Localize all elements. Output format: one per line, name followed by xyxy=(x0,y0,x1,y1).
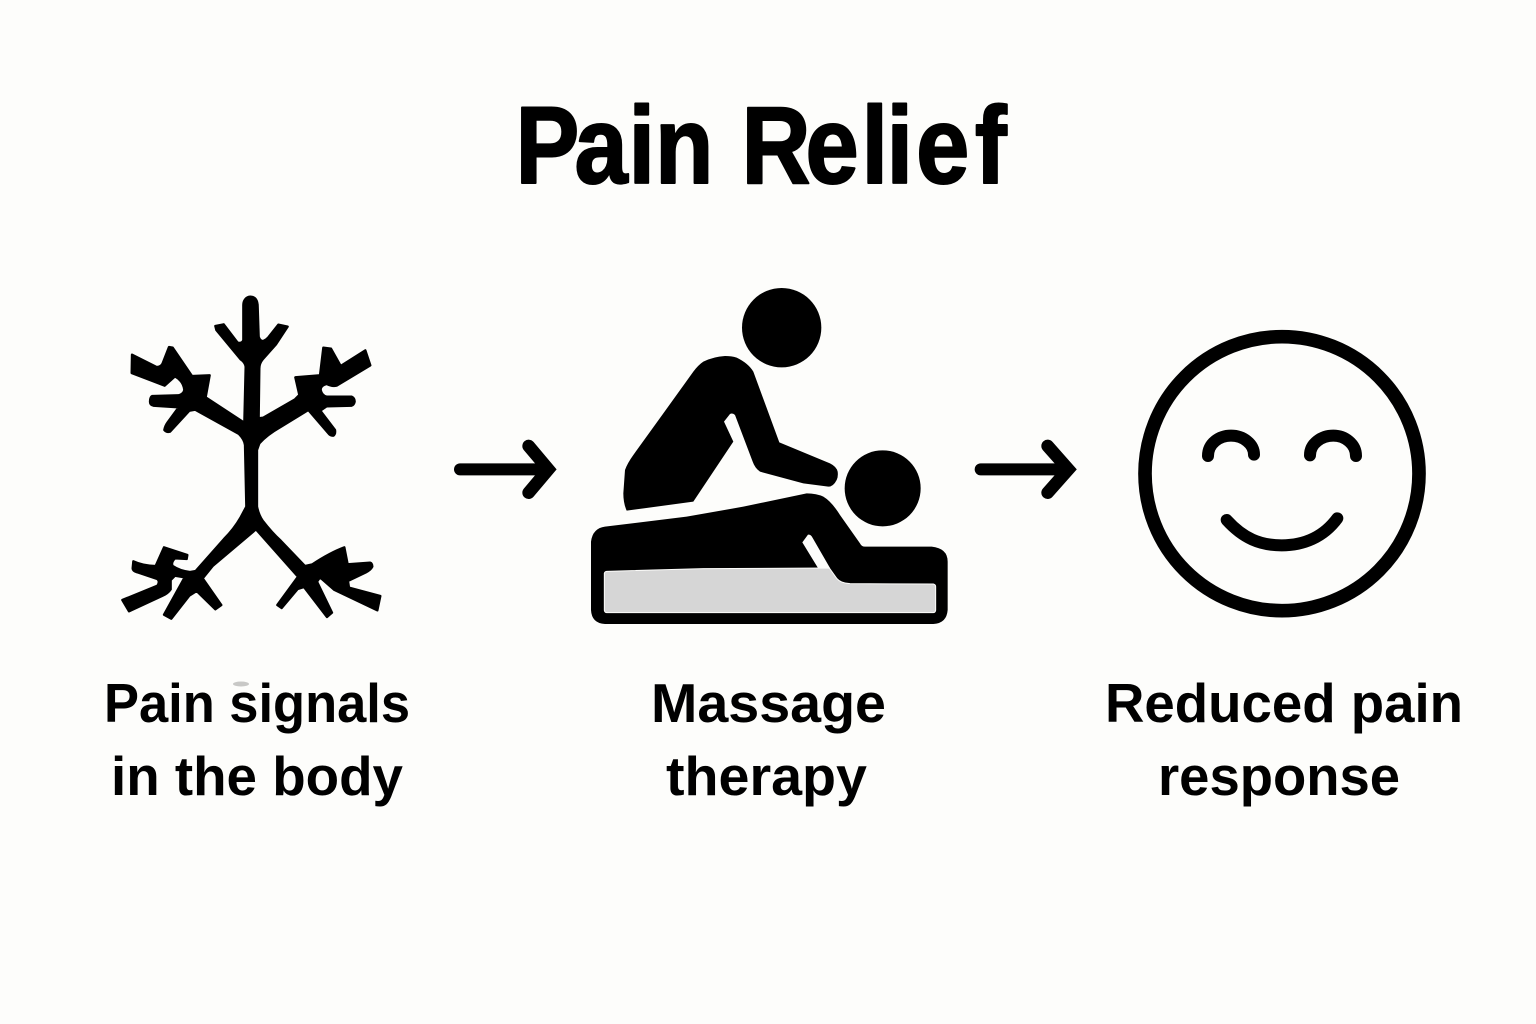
client arm gap xyxy=(802,535,830,568)
client body and table xyxy=(591,493,948,624)
client head xyxy=(845,450,921,526)
icon: massage therapy xyxy=(591,288,948,624)
label: pain signals xyxy=(104,672,410,807)
left eye xyxy=(1208,436,1254,456)
label: reduced pain response: response xyxy=(1158,745,1400,807)
arrow: signals to massage xyxy=(460,446,548,493)
face outline xyxy=(1145,337,1419,611)
icon: branching nerve signals xyxy=(122,297,380,619)
label: pain signals: in the body xyxy=(111,745,403,807)
icon: smiling face xyxy=(1145,337,1419,611)
right eye xyxy=(1310,436,1356,456)
label: massage therapy: therapy xyxy=(666,745,867,807)
table cushion xyxy=(604,568,936,613)
therapist head xyxy=(742,288,821,367)
label: reduced pain response xyxy=(1105,672,1463,807)
arrow: massage to reduced pain xyxy=(981,446,1068,493)
label: massage therapy xyxy=(651,672,886,807)
label: pain signals: Pain signals xyxy=(104,672,410,734)
label: massage therapy: Massage xyxy=(651,672,886,734)
smile xyxy=(1227,518,1337,545)
title: Pain Relief xyxy=(515,84,1007,206)
therapist body xyxy=(623,356,838,511)
label: reduced pain response: Reduced pain xyxy=(1105,672,1463,734)
